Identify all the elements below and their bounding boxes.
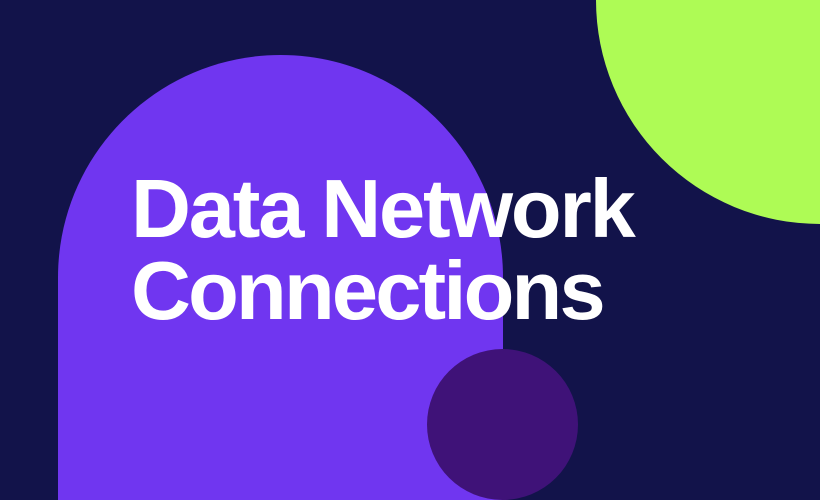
shape: lime circle — [596, 0, 820, 224]
shape: dark purple circle — [427, 349, 578, 500]
shape: purple arch — [58, 55, 503, 500]
title: Connections — [131, 244, 603, 337]
title: Data Network — [131, 162, 634, 255]
title — [131, 162, 636, 337]
